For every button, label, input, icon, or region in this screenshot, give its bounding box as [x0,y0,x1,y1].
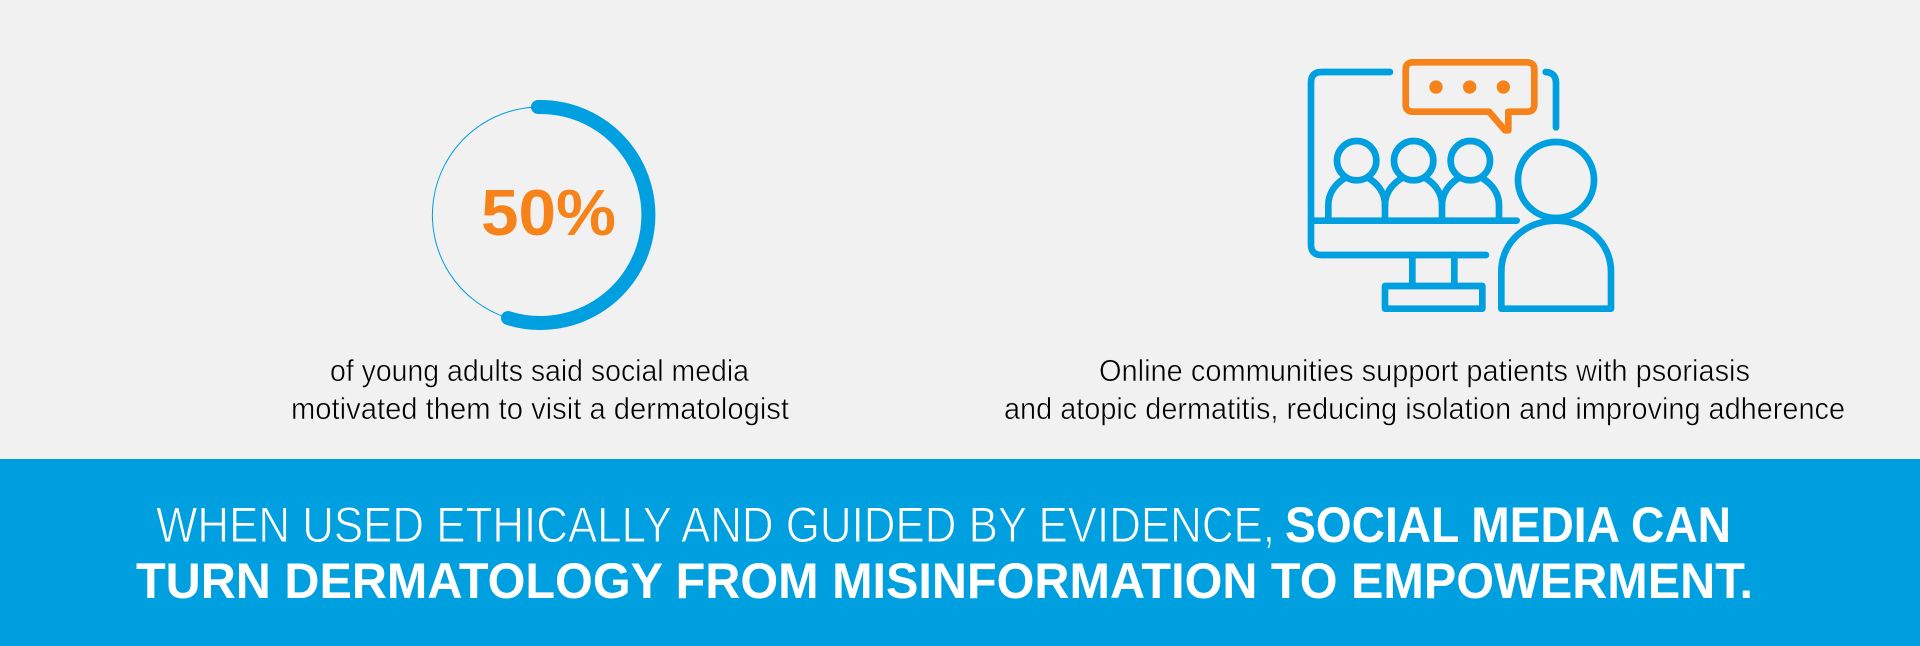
caption: online communities: Online communities support patients with psoriasis [1099,353,1750,388]
caption: online communities: and atopic dermatitis, reducing isolation and improving adherence [1004,391,1845,426]
chart: progress ring [432,107,648,323]
caption: young adults: of young adults said social media [330,353,750,388]
icon: audience of three people [1328,141,1499,221]
icon: speaker person [1501,142,1611,309]
icon: monitor with audience and speaker [1311,62,1611,309]
big number: 50% [481,176,616,249]
banner text: WHEN USED ETHICALLY AND GUIDED BY EVIDENCE, [156,497,1275,553]
caption: online communities [1004,353,1845,426]
banner text: SOCIAL MEDIA CAN [1285,497,1731,553]
panel: 50 percent statistic [291,107,789,426]
panel: online communities [1004,62,1845,426]
banner text: TURN DERMATOLOGY FROM MISINFORMATION TO EMPOWERMENT. [136,553,1753,609]
icon: speech bubble [1406,62,1534,130]
icon: monitor [1311,72,1556,309]
panel: conclusion banner [0,459,1920,646]
caption: young adults [291,353,789,426]
caption: young adults: motivated them to visit a dermatologist [291,391,789,426]
banner text [136,497,1753,609]
